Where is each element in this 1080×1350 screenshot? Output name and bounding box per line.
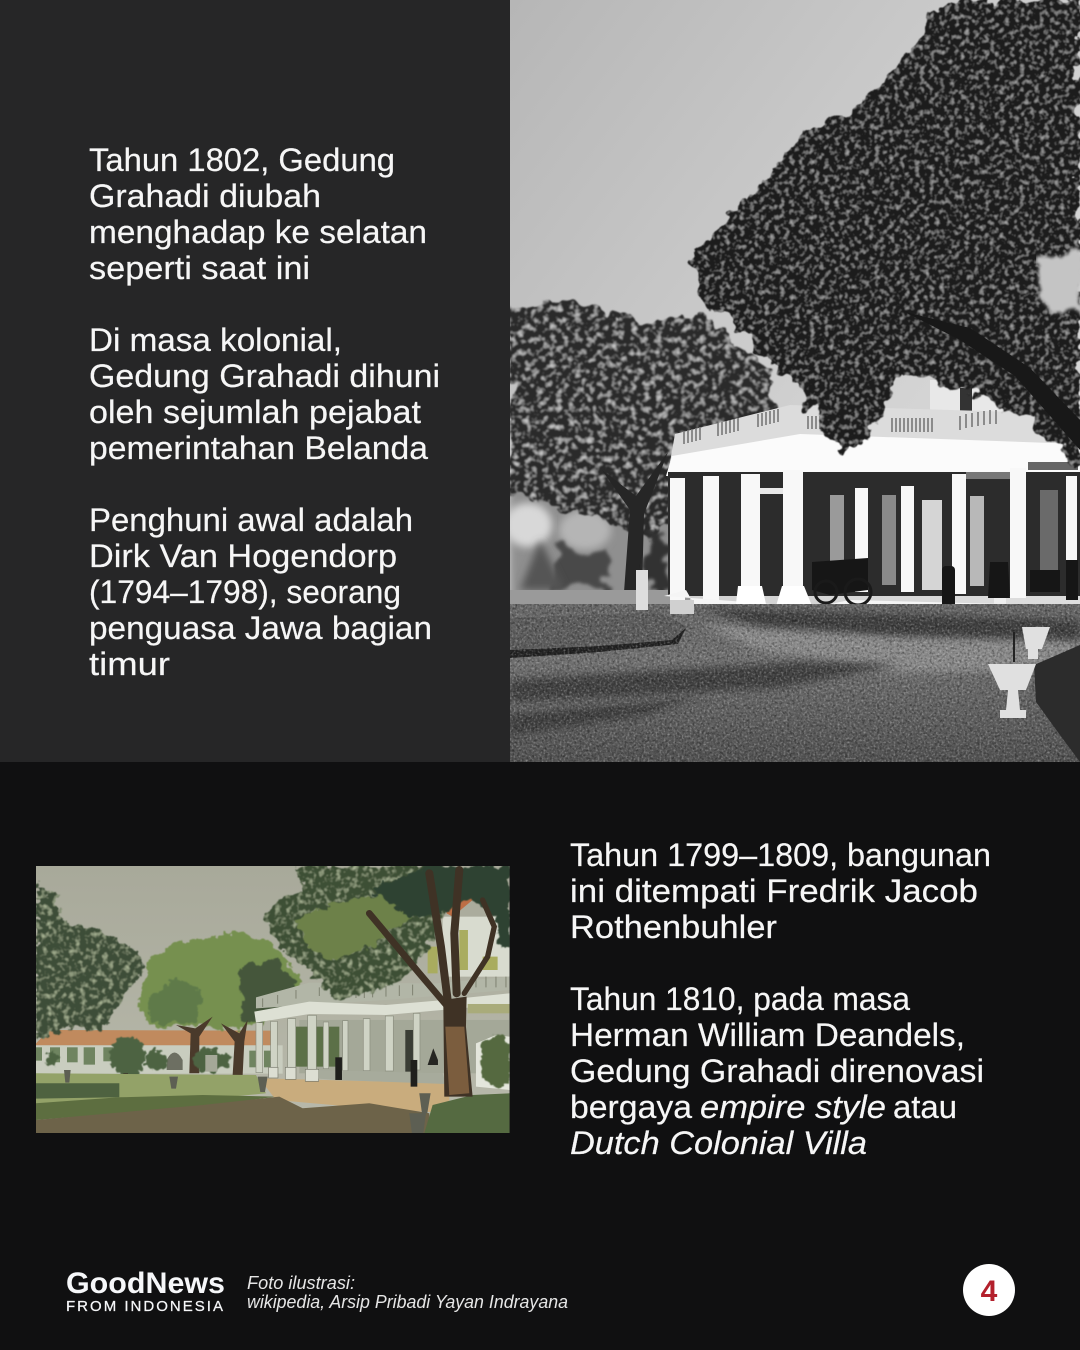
text block: top panel history: Dirk Van Hogendorp (89, 538, 397, 574)
right shrub (479, 1033, 513, 1087)
text block: bottom panel history: Tahun 1799–1809, bangunan (570, 837, 991, 873)
text block: top panel history (89, 142, 440, 682)
text block: bottom panel history: bergaya (570, 1089, 692, 1125)
text block: bottom panel history: Tahun 1810, pada masa (570, 981, 910, 1017)
logo: GoodNews from Indonesia: GoodNews (66, 1267, 225, 1300)
text block: top panel history: Gedung Grahadi dihuni (89, 358, 440, 394)
house (443, 917, 510, 977)
photo: colour lithograph of building (36, 866, 513, 1133)
shrubs (47, 1037, 229, 1077)
text block: top panel history: pemerintahan Belanda (89, 430, 428, 466)
big tree trunk and branches (369, 870, 494, 1007)
text block: bottom panel history: Rothenbuhler (570, 909, 777, 945)
lawn (510, 604, 1080, 762)
text block: top panel history: oleh sejumlah pejabat (89, 394, 421, 430)
photo credit: Foto ilustrasi: (247, 1273, 355, 1293)
text block: top panel history: timur (89, 646, 170, 682)
top left dark text panel (0, 0, 510, 762)
left tree (510, 302, 775, 540)
text block: top panel history: penguasa Jawa bagian (89, 610, 432, 646)
logo: GoodNews from Indonesia: FROM INDONESIA (66, 1298, 223, 1315)
large tree (690, 0, 1080, 470)
text block: top panel history: seperti saat ini (89, 250, 310, 286)
text block: top panel history: Tahun 1802, Gedung (89, 142, 395, 178)
page number badge: 4 (981, 1275, 998, 1308)
text block: top panel history: menghadap ke selatan (89, 214, 427, 250)
text block: bottom panel history: Dutch Colonial Villa (570, 1125, 867, 1161)
photo credit: wikipedia, Arsip Pribadi Yayan Indrayana (247, 1292, 568, 1312)
balustrade (684, 409, 996, 444)
carriage and figures (812, 558, 1078, 604)
long roof and wall (36, 1030, 276, 1045)
photo credit (247, 1273, 568, 1312)
text block: bottom panel history: Gedung Grahadi direnovasi (570, 1053, 984, 1089)
photo: black and white colonial building (504, 0, 1080, 762)
text block: top panel history: Penghuni awal adalah (89, 502, 413, 538)
page number badge (963, 1264, 1015, 1316)
text block: top panel history: Di masa kolonial, (89, 322, 342, 358)
text block: bottom panel history: ini ditempati Fredrik Jacob (570, 873, 978, 909)
text block: bottom panel history: Herman William Deandels, (570, 1017, 965, 1053)
text block: top panel history: (1794–1798), seorang (89, 574, 401, 610)
building (664, 380, 1080, 618)
text block: bottom panel history: atau (893, 1089, 957, 1125)
middle trees (139, 931, 303, 1030)
left tree (36, 887, 144, 1040)
big tree (263, 866, 443, 1000)
ground (36, 1073, 266, 1107)
text block: bottom panel history (570, 837, 991, 1161)
urns (64, 1070, 431, 1133)
logo: GoodNews from Indonesia (66, 1267, 225, 1315)
urns (988, 627, 1050, 718)
text block: top panel history: Grahadi diubah (89, 178, 321, 214)
text block: bottom panel history: empire style (700, 1089, 886, 1125)
distant background (510, 491, 668, 590)
